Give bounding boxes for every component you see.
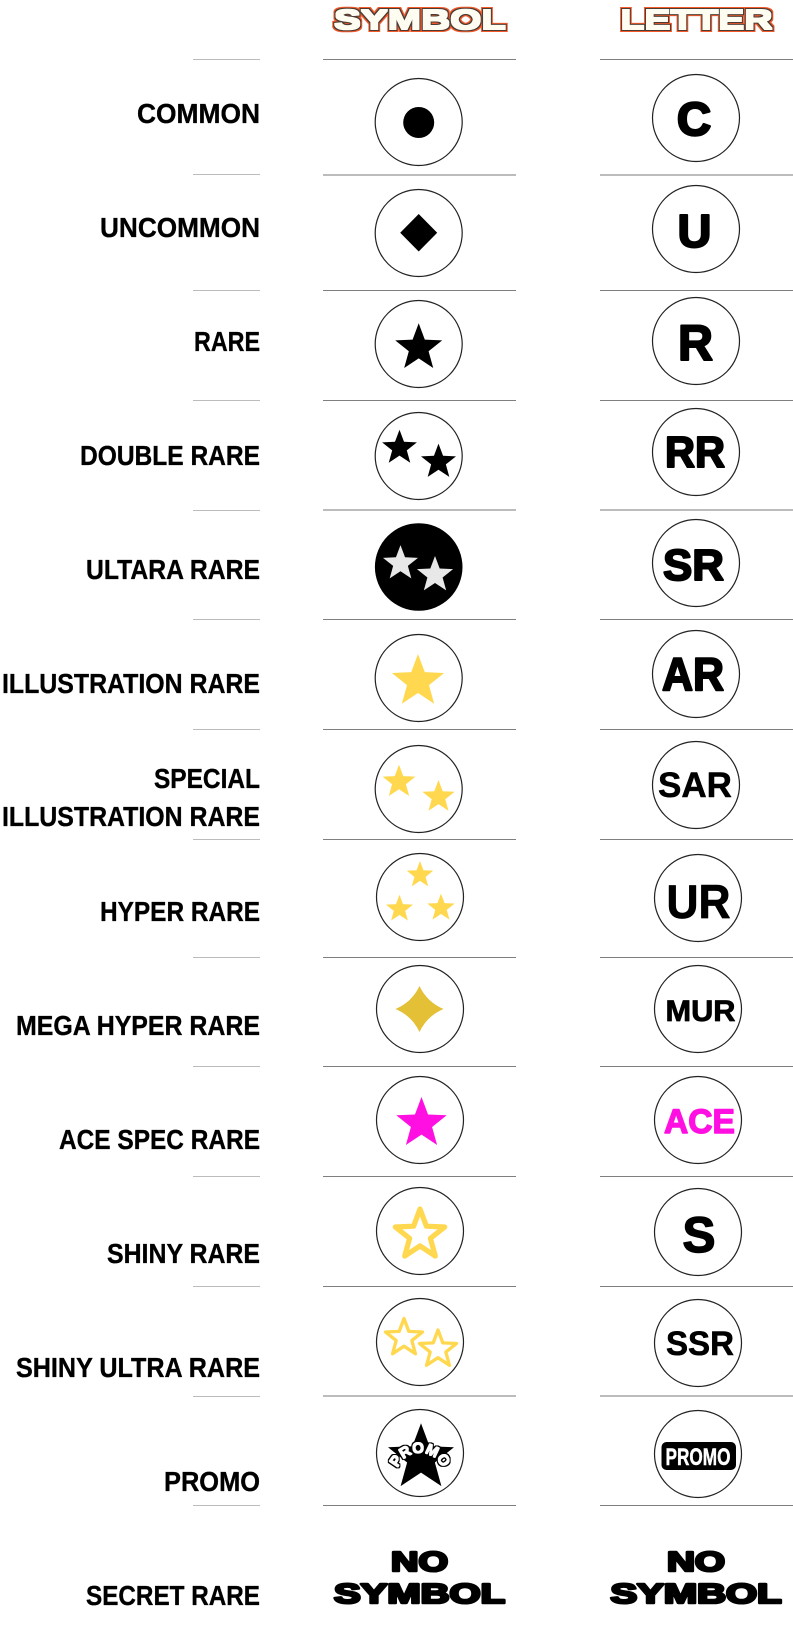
- label: UNCOMMON: UNCOMMON: [100, 212, 260, 243]
- icon: mega hyper rare four-point star: [376, 966, 464, 1052]
- heading: SYMBOL: SYMBOL: [334, 4, 506, 35]
- letter: UR: UR: [666, 875, 730, 928]
- icon: hyper rare three gold stars: [376, 854, 464, 940]
- icon: ace spec magenta star: [376, 1076, 464, 1164]
- letter: R: R: [678, 315, 713, 371]
- letter: S: S: [682, 1207, 716, 1263]
- label: SPECIAL ILLUSTRATION RARE: ILLUSTRATION RARE: [2, 801, 260, 832]
- label: ILLUSTRATION RARE: ILLUSTRATION RARE: [2, 668, 260, 699]
- letter: RR: [652, 408, 740, 496]
- label: SECRET RARE: SECRET RARE: [86, 1580, 260, 1611]
- label: SPECIAL ILLUSTRATION RARE: SPECIAL: [154, 763, 260, 794]
- letter: SR: [652, 520, 740, 606]
- letter: ACE magenta: ACE: [664, 1103, 735, 1141]
- letter: UR: [654, 854, 742, 942]
- letter: R: [652, 298, 740, 384]
- label: DOUBLE RARE: DOUBLE RARE: [80, 440, 260, 471]
- letter: U: [652, 186, 740, 272]
- no symbol text: letter column: SYMBOL: [610, 1578, 782, 1609]
- letter: MUR: [654, 966, 742, 1052]
- letter: C: [652, 74, 740, 162]
- no symbol text: letter column: NO: [667, 1546, 725, 1577]
- letter: U: U: [678, 205, 712, 257]
- letter: PROMO badge: PROMO: [666, 1444, 730, 1471]
- label: SHINY RARE: SHINY RARE: [107, 1238, 260, 1269]
- heading: LETTER: LETTER: [620, 4, 773, 35]
- no symbol text: symbol column: SYMBOL: [334, 1578, 505, 1609]
- letter: SAR: SAR: [658, 766, 732, 805]
- icon: rare star symbol: [375, 300, 462, 388]
- label: COMMON: COMMON: [137, 98, 260, 129]
- label: SPECIAL ILLUSTRATION RARE: [2, 763, 260, 832]
- no symbol text: letter column: [610, 1546, 782, 1609]
- no symbol text: symbol column: NO: [391, 1546, 448, 1577]
- icon: illustration rare gold star: [375, 634, 462, 722]
- letter: C: C: [677, 93, 711, 145]
- icon: special illustration rare two gold stars: [375, 746, 462, 832]
- icon: shiny rare outlined star: [376, 1188, 464, 1274]
- letter: ACE magenta: [654, 1076, 742, 1164]
- icon: common circle symbol: [375, 78, 462, 166]
- letter: AR: AR: [662, 648, 724, 700]
- letter: S: [654, 1188, 742, 1276]
- letter: MUR: MUR: [666, 995, 736, 1028]
- label: ACE SPEC RARE: ACE SPEC RARE: [59, 1124, 260, 1155]
- icon: uncommon diamond symbol: [375, 190, 462, 276]
- letter: AR: [652, 630, 740, 718]
- label: SHINY ULTRA RARE: SHINY ULTRA RARE: [16, 1352, 260, 1383]
- label: RARE: RARE: [194, 326, 260, 357]
- letter: RR: RR: [665, 428, 725, 477]
- label: HYPER RARE: HYPER RARE: [100, 896, 260, 927]
- label: PROMO: PROMO: [164, 1466, 260, 1497]
- letter: SAR: [652, 742, 740, 828]
- letter: PROMO badge: [654, 1410, 742, 1498]
- icon: promo star with arched text: PROMO: [388, 1441, 451, 1468]
- icon: double rare two stars: [375, 412, 462, 500]
- icon: promo star with arched text: [376, 1408, 464, 1498]
- icon: shiny ultra rare two outlined stars: [376, 1298, 464, 1386]
- label: ULTARA RARE: ULTARA RARE: [86, 554, 260, 585]
- letter: SSR: SSR: [666, 1325, 734, 1363]
- icon: ultra rare two silver stars on black: [375, 523, 463, 611]
- no symbol text: symbol column: [334, 1546, 505, 1609]
- label: MEGA HYPER RARE: MEGA HYPER RARE: [16, 1010, 260, 1041]
- letter: SR: SR: [663, 541, 724, 590]
- letter: SSR: [654, 1300, 742, 1386]
